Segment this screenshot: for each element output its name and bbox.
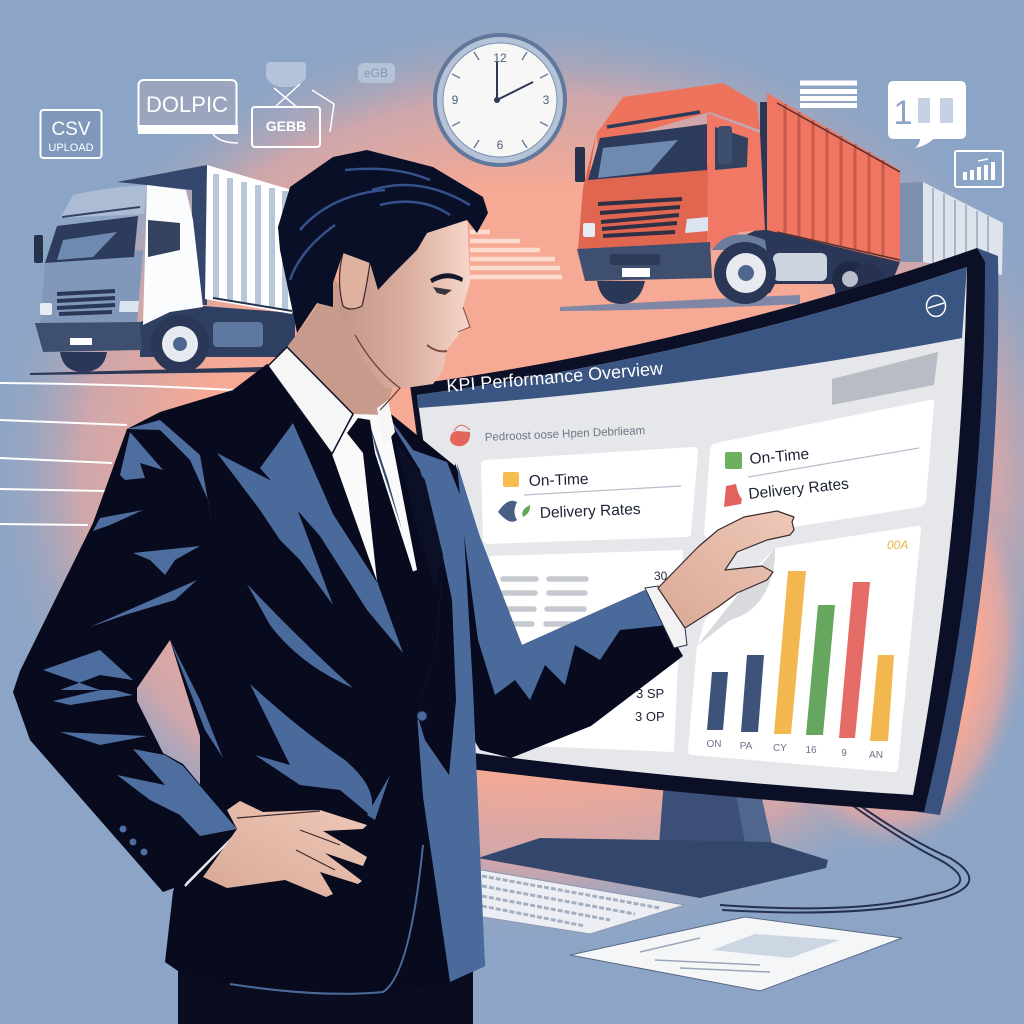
windshield (45, 216, 138, 263)
KPI card left: Delivery Rates (539, 501, 641, 522)
paper on desk (570, 917, 902, 991)
headlights (583, 223, 595, 237)
clock: 9 (452, 93, 459, 107)
icon: small tag: eGB (364, 66, 388, 80)
KPI card right (704, 400, 934, 540)
clock: 12 (493, 51, 507, 65)
table panel (463, 550, 683, 752)
KPI card left: On-Time (529, 471, 589, 490)
icon: speech bubble (888, 81, 966, 148)
grille (598, 199, 682, 236)
neck (287, 280, 400, 415)
bar labels: PA (740, 741, 753, 752)
side window (715, 127, 748, 170)
fuel tank (773, 253, 827, 281)
bar labels: CY (773, 743, 787, 754)
monitor side (918, 248, 998, 815)
keyboard (470, 868, 685, 934)
trousers (178, 960, 473, 1024)
icon: upload document cluster (252, 62, 334, 147)
white truck (30, 165, 295, 375)
curved monitor (410, 248, 998, 815)
windshield (588, 124, 707, 180)
bar labels: 9 (841, 748, 847, 759)
side window (148, 220, 180, 257)
mirror (575, 147, 585, 182)
cab front (578, 130, 708, 250)
sleeve buttons (120, 826, 148, 856)
speed lines (0, 383, 233, 525)
mouth (427, 345, 447, 351)
container front (117, 165, 207, 305)
headlights (40, 303, 52, 315)
jacket hem (230, 845, 423, 994)
KPI card left (481, 447, 698, 544)
hand shadow (697, 548, 775, 646)
tie (347, 418, 417, 620)
icon: upload document cluster: GEBB (266, 118, 306, 134)
motion stripes (470, 232, 562, 277)
wheels (60, 352, 107, 372)
heading: KPI Performance Overview (446, 358, 665, 396)
clock: 6 (497, 138, 504, 152)
icon: CSV upload: CSV (51, 119, 91, 140)
cab side (143, 185, 203, 325)
cab roof (597, 83, 760, 145)
icon: DOLPIC window (138, 80, 238, 143)
icon: speech bubble: 1 (894, 94, 912, 132)
chassis (735, 225, 900, 300)
far arm sleeve (450, 463, 683, 758)
bar labels (706, 739, 883, 761)
shirt cuff (185, 833, 237, 886)
icon: small tag (358, 63, 395, 83)
icon: CSV upload (40, 110, 102, 158)
navy strip (760, 102, 767, 230)
face (340, 210, 470, 388)
ear (340, 252, 370, 309)
collar (268, 347, 353, 454)
shirt cuff (645, 586, 687, 648)
nose line (458, 307, 470, 332)
pointing hand (658, 511, 794, 628)
container (767, 93, 900, 262)
table panel: 30 (654, 569, 668, 583)
shirt (332, 405, 417, 584)
icon: DOLPIC window: DOLPIC (146, 92, 228, 117)
header badge (832, 352, 938, 405)
mirror (34, 235, 43, 263)
near sleeve (13, 390, 237, 892)
container side (205, 165, 292, 314)
bumper (577, 242, 712, 281)
hair (278, 150, 488, 333)
shadow (560, 295, 800, 311)
icon: small bar chart (955, 151, 1003, 187)
gray trailer (900, 182, 1003, 275)
bar chart panel (688, 526, 921, 772)
wheels (597, 281, 645, 304)
screen header (417, 267, 967, 408)
cables (720, 798, 969, 912)
near lapel (240, 364, 293, 444)
table panel: 3 SP (636, 686, 664, 701)
monitor frame (410, 248, 985, 812)
cab roof (60, 185, 147, 218)
hip hand (203, 801, 367, 897)
icon: list lines (800, 83, 857, 106)
bars (707, 571, 894, 741)
cab front (40, 250, 143, 325)
bar labels: AN (869, 750, 883, 761)
clock (433, 33, 567, 167)
fuel tank (213, 322, 263, 347)
monitor stand (478, 780, 828, 898)
far jacket panel (380, 405, 485, 982)
bar labels: 16 (805, 745, 817, 756)
eyebrow (430, 273, 463, 283)
bar chart panel: 00A (887, 538, 908, 552)
rear wheels (832, 261, 868, 297)
sleeve highlights (43, 420, 237, 836)
eye (433, 287, 452, 295)
lower right glow (750, 420, 1024, 860)
chassis (140, 305, 295, 357)
icon: CSV upload: UPLOAD (48, 142, 94, 154)
clock: 3 (543, 93, 550, 107)
torso highlights (170, 453, 390, 820)
bar labels: ON (706, 739, 722, 750)
hair highlights (290, 169, 470, 280)
bumper (35, 322, 142, 352)
red truck (560, 83, 1003, 311)
jaw line (355, 335, 400, 410)
small caption: Pedroost oose Hpen Debrlieam (485, 425, 645, 444)
window control (926, 296, 946, 316)
screen (417, 267, 967, 795)
grille (57, 291, 115, 314)
KPI card right: On-Time (749, 446, 810, 468)
torso (165, 364, 485, 994)
KPI card right: Delivery Rates (748, 476, 850, 503)
shadow (30, 367, 263, 375)
man (13, 150, 794, 1024)
cab side (706, 113, 765, 250)
table panel: 3 OP (635, 709, 665, 724)
